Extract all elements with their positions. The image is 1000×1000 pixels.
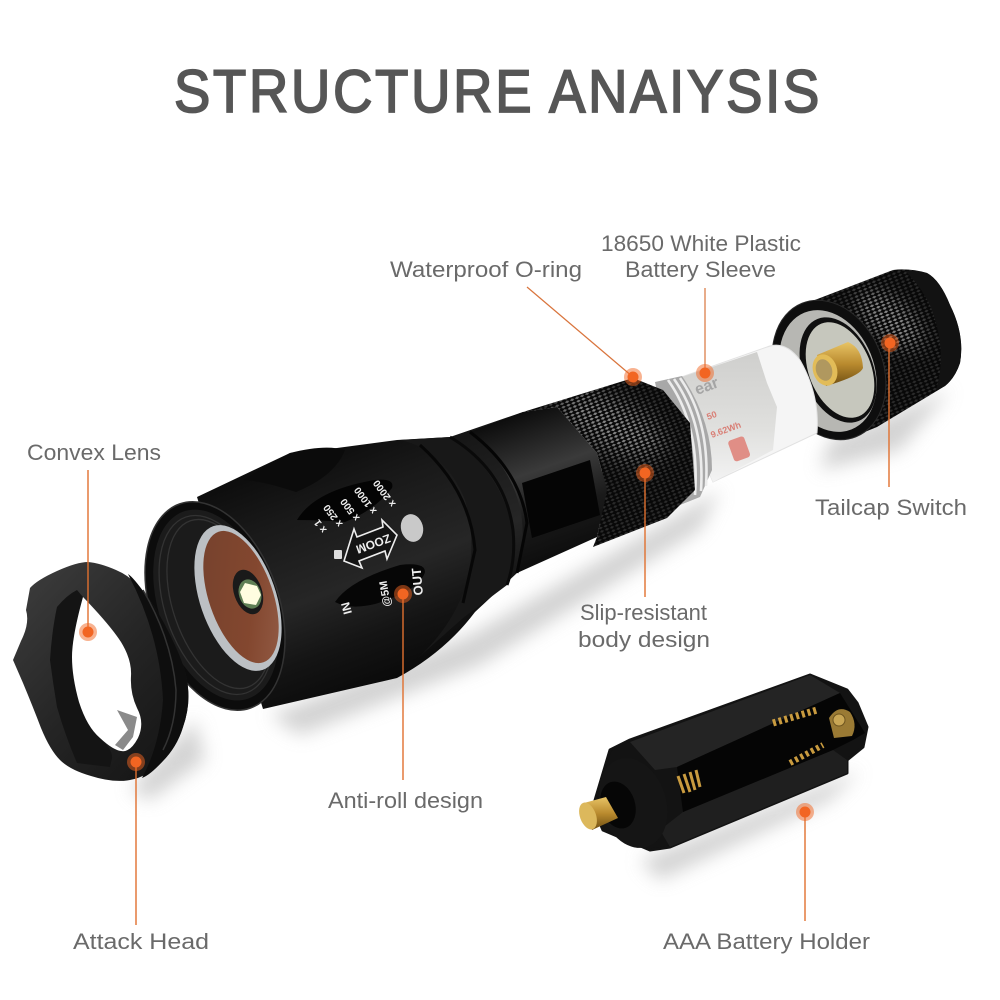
neck (470, 407, 607, 573)
callout: battery sleeve: 18650 White Plastic (601, 231, 801, 256)
callout: AAA battery holder (663, 803, 870, 954)
soft shadows under the objects (130, 390, 950, 880)
callout: battery sleeve: Battery Sleeve (625, 257, 776, 282)
zoom scale text: x 250 (322, 502, 345, 529)
in/out labels: IN (338, 601, 355, 616)
threaded inner wall (130, 493, 302, 717)
labels and leader lines (27, 231, 967, 954)
callout: battery sleeve (601, 231, 801, 382)
callout: tailcap switch (815, 334, 967, 520)
battery holder (576, 675, 867, 857)
head flat facet (243, 448, 345, 492)
zoom scale text: x 1 (312, 517, 329, 535)
callout: attack head (73, 753, 209, 954)
inner threads (762, 295, 894, 447)
callout: AAA battery holder: AAA Battery Holder (663, 929, 870, 954)
zoom scale text: x 2000 (371, 477, 398, 509)
callout: tailcap switch: Tailcap Switch (815, 495, 967, 520)
battery bay (677, 693, 865, 812)
callout: waterproof o-ring (390, 257, 642, 386)
brass switch contact (809, 342, 863, 389)
zoom scale text: x 500 (339, 496, 362, 523)
gold contacts (678, 709, 855, 793)
callout: slip-resistant body (578, 464, 710, 652)
zoom scale text (312, 477, 398, 535)
in/out labels (338, 567, 426, 616)
callout: anti-roll design (328, 585, 483, 813)
zoom arrow emblem (334, 520, 397, 568)
copper LED board (188, 521, 294, 673)
in/out labels: @5M (378, 580, 394, 608)
callout: convex lens: Convex Lens (27, 440, 161, 465)
brass tip (584, 797, 618, 830)
flashlight: battery sleeve (673, 345, 817, 482)
panel: knurled grip (523, 378, 695, 547)
sleeve printed label: ear (693, 375, 721, 399)
rear flange (128, 574, 188, 778)
reflector ring (177, 514, 299, 682)
lens ring: attack head (13, 562, 188, 781)
callout: slip-resistant body: body design (578, 627, 710, 652)
in/out labels: OUT (409, 567, 426, 596)
zoom scale text: x 1000 (352, 484, 379, 516)
flashlight: threaded neck (655, 376, 712, 505)
collar (400, 437, 513, 658)
callout: convex lens (27, 440, 161, 641)
groove above scale (297, 480, 392, 522)
sleeve printed label: 50 (705, 409, 718, 422)
icon: LED emitter (227, 566, 269, 618)
end cap (587, 749, 679, 857)
callout: waterproof o-ring: Waterproof O-ring (390, 257, 582, 282)
title: STRUCTURE ANAIYSIS (174, 58, 822, 125)
black window on neck (522, 460, 600, 538)
grey dot (398, 512, 426, 544)
groove below scale (335, 564, 425, 607)
callout: slip-resistant body: Slip-resistant (580, 600, 707, 625)
recess (50, 590, 112, 767)
front lip of head (119, 483, 311, 729)
callout: anti-roll design: Anti-roll design (328, 788, 483, 813)
flashlight: main body and zoom head (119, 378, 695, 729)
sleeve printed label: 9.62Wh (709, 420, 742, 440)
sleeve printed label (693, 375, 751, 462)
callout: attack head: Attack Head (73, 929, 209, 954)
flashlight: tailcap switch (772, 269, 962, 440)
lens glass (72, 597, 141, 751)
zoom arrow emblem: ZOOM (354, 531, 393, 556)
